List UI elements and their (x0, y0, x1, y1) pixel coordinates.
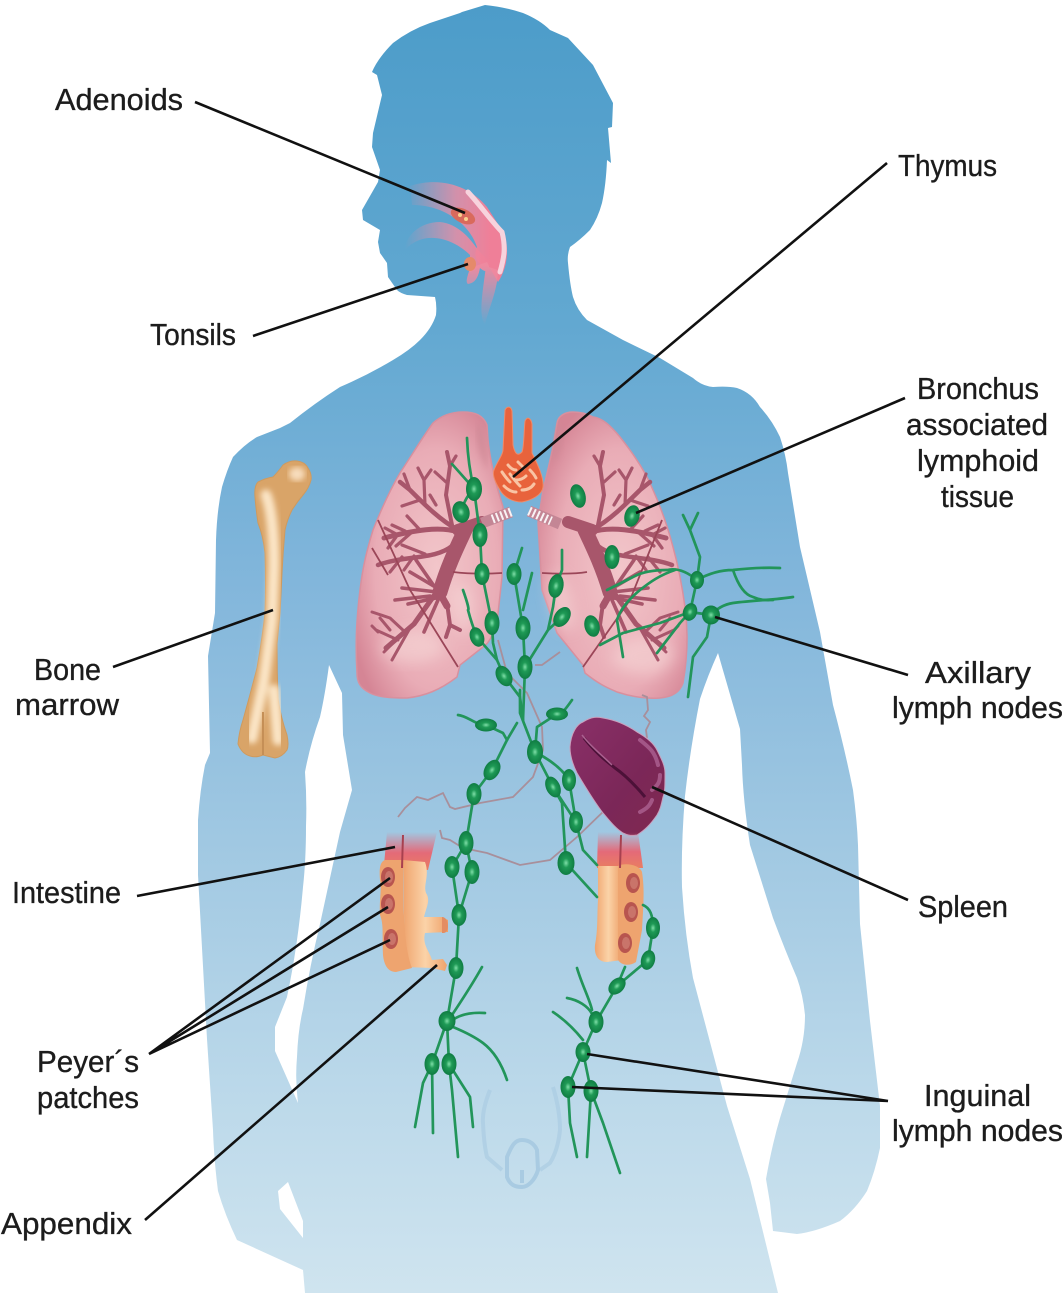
label: Peyer's patches: Peyer´s (37, 1044, 139, 1079)
label: Bronchus associated lymphoid tissue: lymphoid (917, 443, 1039, 478)
patch holes (381, 867, 398, 949)
label: Bone marrow: marrow (15, 687, 120, 722)
label: Axillary lymph nodes (892, 655, 1063, 725)
label: Bronchus associated lymphoid tissue (906, 371, 1048, 514)
body silhouette (198, 5, 880, 1293)
intestine left (380, 832, 448, 972)
appendix tip (442, 917, 448, 933)
throat: adenoids and tonsils (405, 182, 507, 325)
red upper fade (384, 832, 437, 870)
inner column (403, 860, 448, 971)
label: Adenoids: Adenoids (55, 82, 183, 117)
lung highlights (548, 574, 675, 674)
icon: adenoid tissue (448, 204, 478, 228)
fissure lines (542, 520, 662, 667)
label: Spleen: Spleen (918, 889, 1008, 924)
spleen (570, 717, 665, 835)
label: Inguinal lymph nodes: lymph nodes (892, 1113, 1063, 1148)
label: Tonsils: Tonsils (150, 317, 236, 352)
thin brown vessels (398, 640, 650, 865)
lymph nodes (424, 477, 720, 1102)
label: Bone marrow (15, 652, 120, 722)
icon: tonsil tissue (464, 257, 476, 271)
intestine right (595, 832, 644, 965)
label: Inguinal lymph nodes: Inguinal (924, 1078, 1031, 1113)
fissure lines (372, 520, 502, 667)
lower throat fork (467, 262, 498, 325)
soft palate (405, 222, 490, 272)
label: Bronchus associated lymphoid tissue: tissue (941, 479, 1014, 514)
right lung (529, 412, 687, 698)
bronchus stub (482, 512, 511, 523)
bronchial tree (568, 452, 678, 660)
label: Bone marrow: Bone (34, 652, 101, 687)
lung highlights (380, 584, 474, 664)
label: Intestine: Intestine (12, 875, 121, 910)
nasal and pharynx tissue (410, 182, 507, 282)
label: Inguinal lymph nodes (892, 1078, 1063, 1148)
outer column (380, 860, 412, 972)
patch holes (618, 873, 640, 953)
thymus (493, 407, 543, 502)
back wall highlight (468, 192, 504, 272)
label: Bronchus associated lymphoid tissue: Bronchus (917, 371, 1039, 406)
label: Thymus: Thymus (898, 148, 997, 183)
lymph vessels (415, 438, 793, 1173)
label: Bronchus associated lymphoid tissue: associated (906, 407, 1048, 442)
bronchus stub (529, 511, 560, 524)
reproductive outline (483, 1087, 560, 1187)
label: Axillary lymph nodes: Axillary (925, 655, 1032, 690)
label: Appendix: Appendix (1, 1206, 132, 1241)
bronchial tree (372, 452, 482, 660)
inner column (595, 866, 622, 962)
label: Peyer's patches: patches (37, 1080, 139, 1115)
outer column (618, 864, 644, 965)
leader lines (113, 102, 908, 1220)
left lung (356, 412, 511, 698)
red upper fade (597, 832, 643, 868)
label: Axillary lymph nodes: lymph nodes (892, 690, 1063, 725)
bone marrow femur (238, 461, 311, 758)
label: Peyer's patches (37, 1044, 139, 1115)
